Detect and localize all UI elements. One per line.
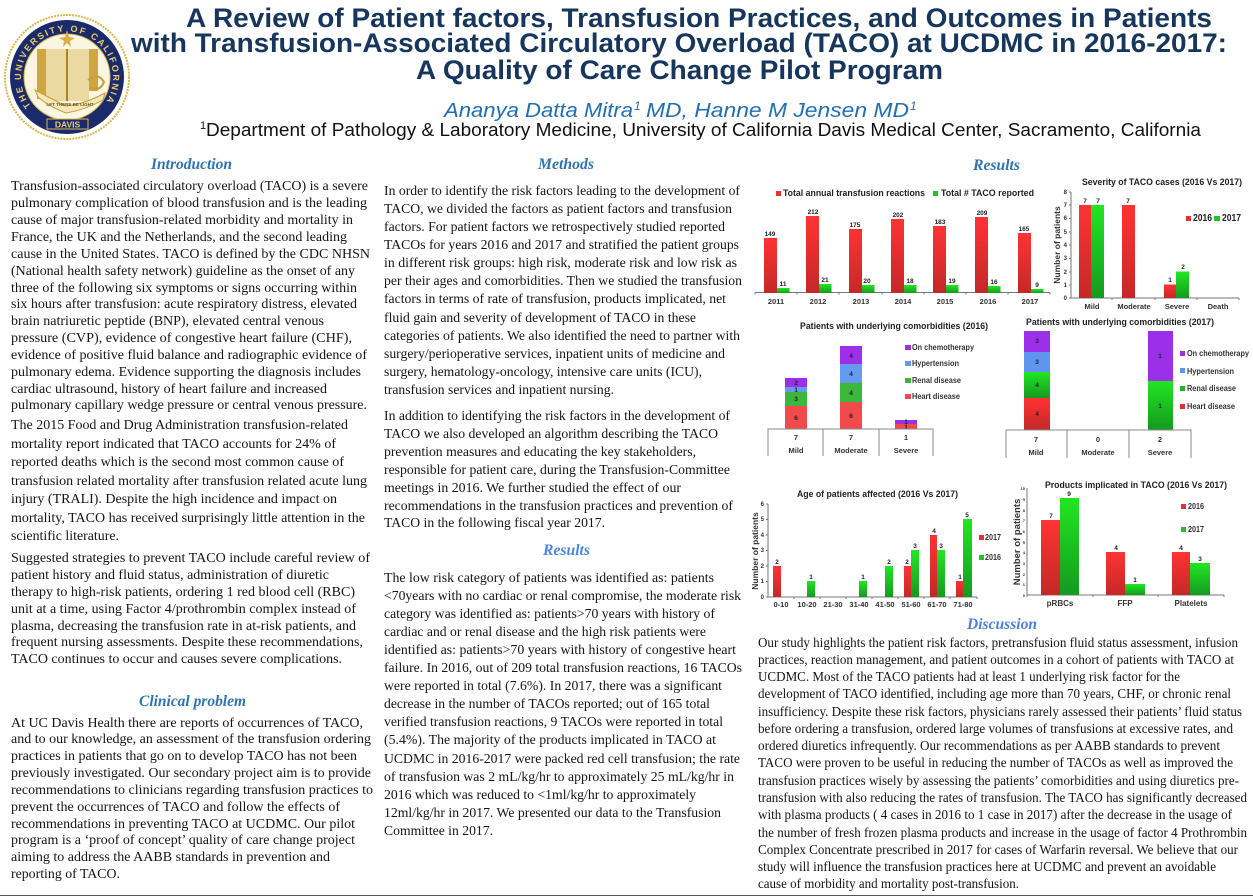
text block: introduction: pressure (CVP), evidence of congestive heart failure (CHF), (11, 331, 352, 346)
chart: age of patients affected: 3 (913, 543, 917, 550)
legend: On chemotherapy (912, 343, 975, 352)
chart: annual transfusion reactions and TACO reported: 209 (977, 210, 988, 217)
text block: methods: fluid gain and severity of development of TACO in these (384, 311, 696, 326)
text block: methods: in different risk groups: high risk, moderate risk and low risk as (384, 256, 737, 271)
chart: comorbidities 2016: 1 (904, 419, 908, 426)
chart: products implicated in TACO: 4 (1023, 550, 1026, 555)
text block: results: decrease in the number of TACOs reported; out of 165 total (384, 697, 710, 712)
chart: annual transfusion reactions and TACO reported: 2014 (895, 297, 912, 306)
text block: introduction: plasma, decreasing the transfusion rate in at-risk patients, and (11, 619, 356, 634)
chart: age of patients affected: 5 (965, 512, 969, 519)
legend (1180, 349, 1250, 411)
chart: products implicated in TACO: Products implicated in TACO (2016 Vs 2017) (1045, 480, 1227, 490)
text block: discussion: before ordering a transfusion, ordered large volumes of transfusions at excessive rates, and (758, 722, 1233, 737)
text block: introduction: unit at a time, using Factor 4/prothrombin complex instead of (11, 602, 356, 617)
heading: Results (middle column): Results (542, 542, 590, 559)
chart: comorbidities 2016: 4 (849, 353, 853, 360)
icon: University of California Davis seal: LET THERE BE LIGHT (46, 102, 94, 107)
legend: Total annual transfusion reactions (783, 188, 925, 199)
chart: products implicated in TACO: 9 (1023, 497, 1026, 502)
chart: comorbidities 2016: Patients with underlying comorbidities (2016) (800, 321, 988, 331)
text block: results: cardiac and or renal disease and the high risk patients were (384, 625, 706, 640)
text block: clinical problem: prevent the occurrences of TACO and follow the effects of (11, 800, 340, 815)
legend: 2017 (1188, 525, 1204, 534)
text block: methods: TACOs for years 2016 and 2017 and stratified the patient groups (384, 238, 739, 253)
text block: introduction (11, 179, 370, 667)
chart: severity of TACO cases: 2 (1064, 270, 1068, 276)
chart: products implicated in TACO: 4 (1179, 545, 1183, 552)
chart: age of patients affected: 10-20 (797, 600, 817, 609)
icon: University of California Davis seal: DAVIS (55, 120, 80, 130)
chart: age of patients affected: Number of patients (750, 512, 760, 590)
data table: Moderate (1081, 448, 1115, 457)
chart: severity of TACO cases: 1 (1064, 283, 1068, 289)
chart: age of patients affected: 3 (939, 543, 943, 550)
text block: introduction: Transfusion-associated circulatory overload (TACO) is a severe (11, 179, 368, 194)
chart: annual transfusion reactions and TACO reported: 18 (906, 278, 914, 285)
chart: age of patients affected: 4 (932, 528, 936, 535)
text block: results: were reported in total (7.6%). In 2017, there was a significant (384, 679, 722, 694)
chart: age of patients affected: 1 (809, 574, 813, 581)
text block: introduction: mortality report indicated that TACO accounts for 24% of (11, 437, 336, 452)
chart: comorbidities 2017: 1 (1158, 353, 1162, 360)
chart: annual transfusion reactions and TACO reported: 165 (1019, 226, 1030, 233)
chart: severity of TACO cases: 1 (1168, 277, 1172, 284)
chart: products implicated in TACO: 4 (1114, 545, 1118, 552)
chart: severity of TACO cases: 0 (1064, 296, 1068, 302)
chart: comorbidities 2016: 6 (794, 415, 798, 422)
heading: Introduction: Introduction (150, 156, 232, 173)
legend: Heart disease (912, 392, 961, 401)
chart: products implicated in TACO: 3 (1198, 556, 1202, 563)
chart: annual transfusion reactions and TACO reported: 175 (850, 222, 861, 229)
legend (1181, 502, 1204, 534)
chart: age of patients affected: 31-40 (849, 600, 869, 609)
text block: methods: In addition to identifying the risk factors in the development of (384, 409, 730, 424)
chart: annual transfusion reactions and TACO reported: 2015 (937, 297, 953, 306)
title: A Review of Patient factors, Transfusion Practices, and Outcomes in Patients (186, 3, 1212, 33)
chart: age of patients affected: 51-60 (901, 600, 921, 609)
chart: comorbidities 2017: 4 (1035, 382, 1039, 389)
title (130, 3, 1227, 85)
text block: methods (384, 184, 742, 531)
chart: severity of TACO cases: Number of patients (1052, 206, 1062, 284)
heading: Discussion: Discussion (966, 616, 1037, 633)
chart: products implicated in TACO: FFP (1117, 599, 1133, 608)
chart: severity of TACO cases: Moderate (1117, 302, 1151, 311)
text block: clinical problem: previously investigated. Our secondary project aim is to provide (11, 766, 371, 781)
chart: comorbidities 2016: 3 (794, 396, 798, 403)
text block: results: (5.4%). The majority of the products implicated in TACO at (384, 733, 716, 748)
heading: Results (right column): Results (972, 157, 1020, 174)
data table (1006, 430, 1191, 458)
text block: introduction: evidence of positive fluid balance and radiographic evidence of (11, 348, 367, 363)
text block: methods: TACO, we divided the factors as patient factors and transfusion (384, 202, 732, 217)
chart: annual transfusion reactions and TACO reported: 20 (863, 278, 871, 285)
text block: methods: surgery, hematology-oncology, intensive care units (ICU), (384, 365, 702, 380)
chart: products implicated in TACO: 7 (1049, 513, 1053, 520)
chart: annual transfusion reactions and TACO reported: 19 (948, 278, 956, 285)
text block: methods: categories of patients. We also identified the need to partner with (384, 329, 740, 344)
chart: products implicated in TACO: pRBCs (1047, 599, 1074, 608)
chart: severity of TACO cases (1052, 177, 1242, 311)
chart: products implicated in TACO: 10 (1021, 486, 1026, 491)
data table: Severe (1148, 448, 1172, 457)
chart: annual transfusion reactions and TACO reported: 16 (990, 279, 998, 286)
chart: severity of TACO cases: 7 (1126, 198, 1130, 205)
text block: results: of transfusion was 2 mL/kg/hr to approximately 25 mL/kg/hr in (384, 770, 734, 785)
chart: age of patients affected: 1 (761, 579, 765, 585)
text block: results: 2016 which was reduced to <1ml/kg/hr to approximately (384, 788, 696, 803)
data table: 7 (1034, 435, 1038, 444)
text block: introduction: pulmonary complication of blood transfusion and is the leading (11, 196, 367, 211)
text block: discussion (758, 636, 1247, 892)
chart: comorbidities 2016: 4 (849, 371, 853, 378)
chart: age of patients affected: 0-10 (773, 600, 789, 609)
chart: age of patients affected: 2 (905, 559, 909, 566)
chart: severity of TACO cases: 7 (1064, 203, 1068, 209)
chart: severity of TACO cases: Mild (1084, 302, 1100, 311)
authors: 1 (910, 99, 917, 113)
legend (979, 533, 1001, 562)
chart: severity of TACO cases: 8 (1064, 190, 1068, 196)
text block: results: 12ml/kg/hr in 2017. We presented our data to the Transfusion (384, 806, 721, 821)
chart: products implicated in TACO: 5 (1023, 540, 1026, 545)
chart: severity of TACO cases: 6 (1064, 216, 1068, 222)
chart: products implicated in TACO (1012, 480, 1227, 608)
chart: products implicated in TACO: Platelets (1175, 599, 1208, 608)
legend (1186, 213, 1241, 224)
chart: annual transfusion reactions and TACO reported: 9 (1035, 282, 1039, 289)
text block: methods: meetings in 2016. We further studied the effect of our (384, 481, 681, 496)
chart: comorbidities 2016: 2 (794, 380, 798, 387)
text block: clinical problem: and to our knowledge, an assessment of the transfusion ordering (11, 732, 371, 747)
text block: results: <70years with no cardiac or renal compromise, the moderate risk (384, 589, 741, 604)
text block: introduction: scientific literature. (11, 529, 119, 544)
chart: severity of TACO cases: 5 (1064, 230, 1068, 236)
icon: University of California Davis seal (4, 14, 130, 140)
text block: results: The low risk category of patients was identified as: patients (384, 571, 714, 586)
legend: 2016 (1188, 502, 1204, 511)
text block: methods: In order to identify the risk factors leading to the development of (384, 184, 740, 199)
text block: results: failure. In 2016, out of 209 total transfusion reactions, 16 TACOs (384, 661, 742, 676)
chart: age of patients affected: Age of patients affected (2016 Vs 2017) (797, 489, 958, 499)
legend: Renal disease (1187, 384, 1236, 393)
text block: methods: factors. For patient factors we retrospectively studied reported (384, 220, 725, 235)
chart: comorbidities 2017: 1 (1158, 403, 1162, 410)
heading: Methods: Methods (537, 156, 594, 173)
text block: introduction: pulmonary edema. Evidence supporting the diagnosis includes (11, 365, 361, 380)
chart: age of patients affected: 5 (761, 517, 765, 523)
text block: introduction: The 2015 Food and Drug Administration transfusion-related (11, 418, 348, 433)
text block: introduction: cause of major transfusion-related morbidity and mortality in (11, 213, 353, 228)
chart: products implicated in TACO: 0 (1023, 593, 1026, 598)
text block: methods: factors in terms of rate of transfusion, products implicated, net (384, 292, 726, 307)
chart: products implicated in TACO: Number of patients (1012, 499, 1023, 585)
chart: comorbidities 2016: 4 (849, 390, 853, 397)
chart: products implicated in TACO: 9 (1067, 491, 1071, 498)
text block: introduction: injury (TRALI). Despite the high incidence and impact on (11, 492, 337, 507)
authors (442, 99, 917, 122)
legend (905, 343, 975, 401)
text block: methods: prevention measures and educating the key stakeholders, (384, 445, 696, 460)
authors: 1 (634, 99, 641, 113)
legend: Hypertension (912, 359, 959, 368)
text block: introduction: therapy to high-risk patients, ordering 1 red blood cell (RBC) (11, 585, 355, 600)
chart: products implicated in TACO: 1 (1133, 577, 1137, 584)
chart: annual transfusion reactions and TACO reported: 212 (808, 209, 819, 216)
chart: annual transfusion reactions and TACO reported: 21 (821, 277, 829, 284)
chart: age of patients affected: 1 (958, 574, 962, 581)
data table (768, 429, 933, 456)
text block: clinical problem: recommendations in preventing TACO at UCDMC. Our pilot (11, 817, 355, 832)
chart: age of patients affected: 2 (887, 559, 891, 566)
legend: Hypertension (1187, 367, 1234, 376)
text block: introduction: mortality, TACO has received surprisingly little attention in the (11, 511, 365, 526)
text block: introduction: (National health safety network) guideline as the onset of any (11, 264, 355, 279)
text block: discussion: study will influence the transfusion practices here at UCDMC and prevent an avoidable (758, 860, 1216, 875)
text block: clinical problem: program is a ‘proof of concept’ quality of care change project (11, 833, 355, 848)
chart: age of patients affected: 3 (761, 548, 765, 554)
chart: annual transfusion reactions and TACO reported: 11 (780, 281, 787, 288)
text block: clinical problem: practices in patients that go on to develop TACO has not been (11, 749, 357, 764)
chart: age of patients affected: 71-80 (953, 600, 973, 609)
text block: introduction: France, the UK and the Netherlands, and the second leading (11, 230, 347, 245)
chart: comorbidities 2017: 3 (1035, 338, 1039, 345)
text block: methods: per their ages and comorbidities. Then we studied the transfusion (384, 274, 742, 289)
legend: Total # TACO reported (941, 188, 1034, 199)
text block: results: identified as: patients>70 years with history of congestive heart (384, 643, 736, 658)
chart: annual transfusion reactions and TACO reported: 202 (893, 212, 904, 219)
legend: On chemotherapy (1187, 349, 1250, 358)
title: A Quality of Care Change Pilot Program (416, 55, 943, 85)
text block: methods: transfusion services and inpatient nursing. (384, 383, 614, 398)
text block: clinical problem: At UC Davis Health there are reports of occurrences of TACO, (11, 716, 363, 731)
text block: introduction: frequent nursing assessments. Despite these recommendations, (11, 635, 363, 650)
chart: annual transfusion reactions and TACO reported: 183 (935, 219, 946, 226)
text block: discussion: UCDMC. Most of the TACO patients had at least 1 underlying risk factor for the (758, 670, 1180, 685)
chart: age of patients affected: 2 (775, 559, 779, 566)
text block: introduction: three of the following six symptoms or signs occurring within (11, 281, 357, 296)
chart: severity of TACO cases: 7 (1096, 198, 1100, 205)
text block: discussion: ordered diuretics infrequently. Our recommendations as per AABB standards to prevent (758, 739, 1220, 754)
chart: products implicated in TACO: 3 (1023, 561, 1026, 566)
chart: severity of TACO cases: Severe (1165, 302, 1189, 311)
text block: introduction: TACO continues to occur and causes severe complications. (11, 652, 342, 667)
chart: annual transfusion reactions and TACO reported: 2013 (853, 297, 869, 306)
chart: age of patients affected: 6 (761, 502, 765, 508)
text block: clinical problem: aiming to address the AABB standards in prevention and (11, 850, 330, 865)
chart: age of patients affected: 0 (761, 595, 765, 601)
chart: products implicated in TACO: 8 (1023, 508, 1026, 513)
chart: age of patients affected: 21-30 (823, 600, 843, 609)
chart: products implicated in TACO: 7 (1023, 518, 1026, 523)
text block: introduction: pulmonary capillary wedge pressure or central venous pressure. (11, 398, 367, 413)
chart: products implicated in TACO: 1 (1023, 582, 1026, 587)
text block: discussion: cause of morbidity and mortality post-transfusion. (758, 877, 1019, 892)
chart: severity of TACO cases: Severity of TACO cases (2016 Vs 2017) (1082, 177, 1242, 187)
legend: Renal disease (912, 376, 961, 385)
data table: Mild (1028, 448, 1044, 457)
chart: age of patients affected: 1 (861, 574, 865, 581)
text block: introduction: transfusion related mortality after transfusion related acute lung (11, 474, 367, 489)
text block: results: verified transfusion reactions, 9 TACOs were reported in total (384, 715, 723, 730)
text block: introduction: reported deaths which is the second most common cause of (11, 455, 344, 470)
legend: Heart disease (1187, 402, 1236, 411)
chart: annual transfusion reactions and TACO reported: 2012 (810, 297, 826, 306)
text block: methods: TACO in the following fiscal year 2017. (384, 516, 605, 531)
chart: severity of TACO cases: 2 (1181, 264, 1185, 271)
text block: introduction: cardiac ultrasound, history of heart failure and increased (11, 382, 327, 397)
chart: annual transfusion reactions and TACO reported (755, 188, 1050, 306)
chart: comorbidities 2016: 6 (849, 413, 853, 420)
authors: MD, Hanne M Jensen MD (646, 99, 909, 122)
icon: University of California Davis seal: THE UNIVERSITY OF CALIFORNIA (14, 25, 120, 110)
affiliation: 1 (200, 120, 206, 132)
chart: severity of TACO cases: 7 (1083, 198, 1087, 205)
text block: results (384, 571, 742, 839)
chart: products implicated in TACO: 2 (1023, 572, 1026, 577)
text block: introduction: cause in the United States. TACO is defined by the CDC NHSN (11, 247, 370, 262)
affiliation: Department of Pathology & Laboratory Medicine, University of California Davis Medical Center, Sacramento, California (206, 120, 1202, 140)
chart: age of patients affected (750, 489, 1001, 609)
data table: Moderate (834, 446, 868, 455)
text block: discussion: with plasma products ( 4 cases in 2016 to 1 case in 2017) after the decrease in the usage of (758, 808, 1232, 823)
chart: age of patients affected: 61-70 (927, 600, 947, 609)
chart: comorbidities 2016: 1 (794, 387, 798, 394)
legend: 2016 (1193, 213, 1212, 224)
chart: age of patients affected: 41-50 (875, 600, 895, 609)
text block: methods: responsible for patient care, during the Transfusion-Committee (384, 463, 730, 478)
text block: results: Committee in 2017. (384, 824, 493, 839)
chart: comorbidities 2017 (1006, 317, 1250, 458)
text block: introduction: Suggested strategies to prevent TACO include careful review of (11, 551, 370, 566)
text block: introduction: six hours after transfusion: acute respiratory distress, elevated (11, 297, 357, 312)
data table: 1 (904, 433, 908, 442)
chart: severity of TACO cases: 3 (1064, 256, 1068, 262)
data table: Mild (788, 446, 804, 455)
text block: results: category was identified as: patients>70 years with history of (384, 607, 715, 622)
legend: 2017 (1222, 213, 1241, 224)
text block: clinical problem: reporting of TACO. (11, 867, 120, 882)
text block: methods: TACO we also developed an algorithm describing the TACO (384, 427, 718, 442)
chart: severity of TACO cases: 4 (1064, 243, 1068, 249)
legend (776, 188, 1034, 199)
text block: clinical problem: recommendations to clinicians regarding transfusion practices to (11, 783, 373, 798)
authors: Ananya Datta Mitra (442, 99, 633, 122)
chart: comorbidities 2016: 1 (904, 424, 908, 431)
chart: comorbidities 2016 (768, 321, 988, 456)
chart: comorbidities 2017: Patients with underlying comorbidities (2017) (1026, 317, 1214, 327)
chart: annual transfusion reactions and TACO reported: 149 (765, 231, 776, 238)
text block: clinical problem (11, 716, 373, 882)
chart: annual transfusion reactions and TACO reported: 2017 (1022, 297, 1038, 306)
chart: annual transfusion reactions and TACO reported: 2011 (768, 297, 784, 306)
chart: age of patients affected: 4 (761, 533, 765, 539)
data table: 2 (1158, 435, 1162, 444)
chart: comorbidities 2017: 3 (1035, 359, 1039, 366)
text block: introduction: patient history and fluid status, administration of diuretic (11, 568, 329, 583)
text block: discussion: development of TACO identified, including age more than 70 years, CHF, or chronic renal (758, 687, 1231, 702)
chart: products implicated in TACO: 6 (1023, 529, 1026, 534)
text block: discussion: TACO were proven to be useful in reducing the number of TACOs as well as improved the (758, 756, 1233, 771)
data table: 0 (1096, 435, 1100, 444)
data table: Severe (894, 446, 918, 455)
data table: 7 (849, 433, 853, 442)
chart: annual transfusion reactions and TACO reported: 2016 (980, 297, 996, 306)
heading: Clinical problem: Clinical problem (139, 693, 246, 710)
text block: methods: surgery/perioperative services, inpatient units of medicine and (384, 347, 725, 362)
title: with Transfusion-Associated Circulatory Overload (TACO) at UCDMC in 2016-2017: (130, 28, 1227, 58)
text block: introduction: brain natriuretic peptide (BNP), elevated central venous (11, 314, 324, 329)
chart: severity of TACO cases: Death (1208, 302, 1229, 311)
data table: 7 (794, 433, 798, 442)
text block: methods: recommendations in the transfusion practices and prevention of (384, 499, 733, 514)
text block: results: UCDMC in 2016-2017 were packed red cell transfusion; the rate (384, 752, 740, 767)
legend: 2016 (985, 553, 1001, 562)
legend: 2017 (985, 533, 1001, 542)
chart: comorbidities 2017: 4 (1035, 411, 1039, 418)
chart: age of patients affected: 2 (761, 564, 765, 570)
